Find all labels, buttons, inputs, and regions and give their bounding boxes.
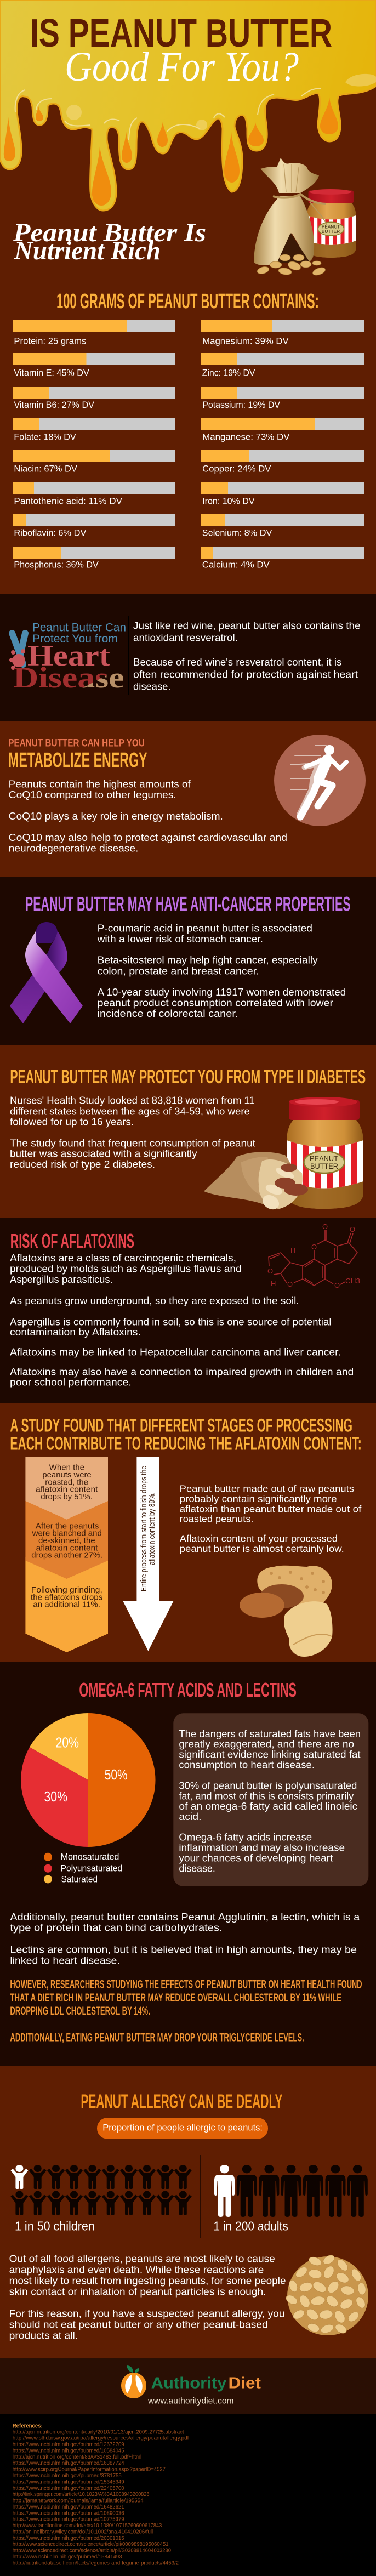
title: Good For You? [65, 44, 299, 90]
callout: saturated fats: The dangers of saturated fats have been [179, 1728, 361, 1739]
text: anaphylaxis [9, 2254, 286, 2341]
references list: https://www.ncbi.nlm.nih.gov/pubmed/16387724 [13, 2460, 124, 2466]
panel: omega-6 and lectins [0, 1662, 376, 2066]
text: anaphylaxis: Out of all food allergens, peanuts are most likely to cause [9, 2254, 275, 2265]
icon: aflatoxin molecule: O [311, 1243, 317, 1251]
arrow: entire process: aflatoxin content by 89%. [148, 1492, 157, 1565]
bar chart: nutrients left [13, 320, 175, 570]
callout: saturated fats: significant evidence linking saturated fat [179, 1749, 361, 1760]
text: anaphylaxis: products at all. [9, 2330, 78, 2341]
icon: aflatoxin molecule: O [267, 1267, 273, 1275]
bar chart: nutrients right: Zinc: 19% DV [202, 368, 255, 378]
icon: aflatoxin molecule: O [287, 1280, 293, 1288]
pill label: proportion [97, 2118, 268, 2139]
heading: heart disease: Protect You from [32, 633, 118, 645]
icon: orange logo [121, 2365, 146, 2398]
references list: https://www.ncbi.nlm.nih.gov/pubmed/22405700 [13, 2485, 124, 2492]
chevron steps: aflatoxin content [36, 1485, 98, 1494]
orange drip centres [4, 97, 338, 206]
references list: https://www.ncbi.nlm.nih.gov/pubmed/16482621 [13, 2504, 124, 2510]
icon: purple ribbon [10, 922, 83, 1023]
pictogram: children [10, 2165, 192, 2215]
text: CoQ10: CoQ10 compared to other legumes. [9, 789, 176, 800]
bar chart: nutrients left: Niacin: 67% DV [14, 464, 77, 474]
text: cancer: peanut product consumption correlated with lower [98, 997, 333, 1008]
illustration: peanut butter jar: PEANUT [310, 1154, 338, 1163]
icon: aflatoxin molecule [267, 1222, 360, 1289]
references list: http://ajcn.nutrition.org/content/83/6/S1483.full.pdf+html [13, 2454, 141, 2460]
references list: https://www.ncbi.nlm.nih.gov/pubmed/20301015 [13, 2535, 124, 2541]
text: aflatoxins: Aspergillus is commonly found in soil, so this is one source of potential [10, 1317, 332, 1328]
icon: aflatoxin molecule: O [322, 1222, 328, 1231]
text: lectins: Lectins are common, but it is believed that in high amounts, they may be [10, 1944, 357, 1955]
pie chart: fat composition: 50% [105, 1766, 128, 1783]
references list: https://www.ncbi.nlm.nih.gov/pubmed/10584045 [13, 2447, 124, 2454]
text: resveratrol: often recommended for protection against heart [133, 669, 358, 680]
bar chart: nutrients left: Folate: 18% DV [14, 432, 76, 442]
references list: https://www.ncbi.nlm.nih.gov/pubmed/12672709 [13, 2441, 124, 2448]
icon: aflatoxin molecule: O [350, 1225, 355, 1233]
icon: stethoscope gear [9, 633, 25, 670]
text: diabetes study: Nurses' Health Study looked at 83,818 women from 11 [10, 1095, 255, 1106]
illustration: jar behind sack: BUTTER [322, 229, 340, 234]
references list: https://www.ncbi.nlm.nih.gov/pubmed/15345349 [13, 2478, 124, 2485]
text: aflatoxins [10, 1253, 354, 1387]
pill label: proportion: Proportion of people allergic to peanuts: [102, 2123, 263, 2133]
callout: saturated fats: consumption to heart disease. [179, 1759, 315, 1770]
references list: https://www.ncbi.nlm.nih.gov/pubmed/10890036 [13, 2510, 124, 2516]
text: cancer: incidence of colorectal caner. [98, 1008, 238, 1019]
chevron steps: Following grinding, [31, 1585, 102, 1595]
title [30, 12, 332, 90]
bar chart: nutrients right: Iron: 10% DV [202, 496, 255, 506]
text: resveratrol: antioxidant resveratrol. [133, 632, 238, 643]
arrow: entire process [123, 1457, 174, 1651]
heading: aflatoxins: RISK OF AFLATOXINS [10, 1230, 134, 1252]
icon: runner [274, 735, 366, 826]
text: cancer: with a lower risk of stomach cancer. [97, 934, 263, 945]
illustration: jar behind sack [307, 189, 356, 258]
heading: heart disease: Disease [13, 661, 124, 694]
chevron steps [25, 1457, 108, 1652]
references list: http://www.tandfonline.com/doi/abs/10.1080/10715760600617843 [13, 2522, 162, 2529]
illustration: peanuts [240, 1566, 333, 1657]
chevron steps: When the [49, 1463, 84, 1472]
text: CoQ10: Peanuts contain the highest amounts of [9, 779, 191, 790]
references list: http://jamanetwork.com/journals/jama/fullarticle/195554 [13, 2498, 144, 2504]
text: raw versus roasted: Aflatoxin content of your processed [180, 1533, 338, 1544]
text: anaphylaxis: anaphylaxis and even death. While these reactions are [9, 2265, 264, 2276]
panel: risk of aflatoxins [0, 1218, 376, 1403]
drip highlights [15, 89, 321, 140]
text: cancer: P-coumaric acid in peanut butter is associated [98, 923, 312, 934]
legend [44, 1852, 122, 1884]
text: diabetes study: different states between the ages of 34-59, who were [10, 1106, 250, 1117]
text: aflatoxins: Aflatoxins are a class of carcinogenic chemicals, [10, 1253, 236, 1264]
bar chart: nutrients right: Calcium: 4% DV [202, 560, 270, 570]
text: anaphylaxis: For this reason, if you have a suspected peanut allergy, you [9, 2308, 284, 2319]
illustration: peanut butter jar [287, 1097, 363, 1209]
bar chart: nutrients left: Riboflavin: 6% DV [14, 528, 86, 538]
text: aflatoxins: As peanuts grow underground, so they are exposed to the soil. [10, 1295, 299, 1306]
logo wordmark: Authority [151, 2375, 226, 2392]
chevron steps: de-skinned, the [38, 1536, 95, 1545]
bar chart: nutrients right: Potassium: 19% DV [202, 400, 280, 410]
illustration: peanut sack [254, 158, 327, 277]
text: raw versus roasted: Peanut butter made out of raw peanuts [180, 1483, 354, 1494]
references heading: References: [13, 2423, 43, 2429]
text: cancer: A 10-year study involving 11917 women demonstrated [98, 987, 346, 998]
chevron steps: roasted, the [45, 1477, 88, 1487]
text: raw versus roasted: peanut butter is almost certainly low. [180, 1543, 344, 1554]
heading: heart disease: Peanut Butter Can [32, 622, 126, 634]
text: diabetes study: followed for up to 16 years. [10, 1116, 134, 1127]
text: lectins: type of protein that can bind carbohydrates. [10, 1923, 223, 1934]
text: raw versus roasted [180, 1483, 361, 1554]
chevron steps: the aflatoxins drops [31, 1593, 102, 1602]
chevron steps: drops by 51%. [41, 1492, 93, 1502]
subheading: nutrient rich: Nutrient Rich [14, 236, 161, 265]
icon: aflatoxin molecule: O [334, 1281, 340, 1289]
heading: metabolize: METABOLIZE ENERGY [8, 749, 147, 772]
references list: https://www.ncbi.nlm.nih.gov/pubmed/10775379 [13, 2516, 124, 2523]
legend: Monosaturated [61, 1852, 119, 1862]
legend: Polyunsaturated [61, 1863, 122, 1873]
references list: http://www.sciencedirect.com/science/article/pii/S0308814604003280 [13, 2547, 171, 2554]
chevron steps: an additional 11%. [33, 1600, 100, 1610]
references list [13, 2429, 189, 2566]
heading: processing study [10, 1415, 362, 1454]
references list: http://link.springer.com/article/10.1023/A%3A1008943200826 [13, 2491, 150, 2498]
references list: http://www.slhd.nsw.gov.au/rpa/allergy/resources/allergy/peanutallergy.pdf [13, 2435, 189, 2442]
chevron steps: aflatoxin content [36, 1543, 98, 1553]
callout: saturated fats: disease. [179, 1863, 215, 1874]
heading: metabolize [8, 738, 147, 772]
pie chart: fat composition: 30% [44, 1788, 67, 1805]
panel: nutrient header and bars [0, 0, 376, 594]
text: lectins [10, 1912, 360, 1966]
panel: footer logo [0, 2358, 376, 2414]
text: lectins: linked to heart disease. [10, 1955, 120, 1966]
panel: metabolize energy [0, 721, 376, 877]
callout: saturated fats: your chances of developing heart [179, 1853, 333, 1864]
text: cancer [97, 923, 346, 1019]
text: resveratrol: disease. [133, 681, 171, 692]
callout: saturated fats: fat, and most of this is consists primarily [179, 1790, 354, 1801]
pictogram: adults [214, 2165, 368, 2217]
text: diabetes study: reduced risk of type 2 diabetes. [10, 1159, 155, 1170]
text: raw versus roasted: roasted peanuts. [180, 1514, 253, 1525]
panel: peanut allergy [0, 2066, 376, 2358]
references list: http://nutritiondata.self.com/facts/legumes-and-legume-products/4453/2 [13, 2560, 179, 2566]
text: aflatoxins: produced by molds such as Aspergillus flavus and [10, 1264, 242, 1275]
heading: heart disease [13, 622, 126, 694]
panel: anti-cancer [0, 877, 376, 1045]
panel: references [0, 2414, 376, 2576]
text: resveratrol: Because of red wine's resveratrol content, it is [133, 657, 341, 668]
icon: aflatoxin molecule: H [271, 1280, 276, 1288]
illustration: peanut pile [284, 2253, 368, 2335]
stat: adults: 1 in 200 adults [213, 2219, 288, 2233]
references list: http://www.ncbi.nlm.nih.gov/pubmed/15841493 [13, 2554, 122, 2560]
callout: saturated fats: acid. [179, 1811, 202, 1822]
icon: aflatoxin molecule: H [290, 1246, 295, 1254]
text: anaphylaxis: skin contact or inhalation of peanut particles is enough. [9, 2287, 266, 2298]
logo wordmark: Diet [228, 2375, 261, 2392]
logo wordmark [147, 2375, 261, 2406]
text: CoQ10 [9, 779, 287, 854]
bar chart: nutrients left: Protein: 25 grams [14, 337, 86, 346]
text: CoQ10: neurodegenerative disease. [9, 843, 138, 854]
text: diabetes study [10, 1095, 255, 1170]
heading: heart disease: Heart [27, 639, 110, 672]
references list: http://www.scirp.org/Journal/PaperInformation.aspx?paperID=4527 [13, 2466, 166, 2473]
text: aflatoxins: Aflatoxins may be linked to Hepatocellular carcinoma and liver cancer. [10, 1346, 341, 1357]
text: aflatoxins: Aspergillus parasiticus. [10, 1274, 113, 1285]
bar chart: nutrients right: Copper: 24% DV [202, 464, 271, 474]
text: CoQ10: CoQ10 plays a key role in energy metabolism. [9, 811, 223, 822]
illustration: jar behind sack: PEANUT [322, 224, 340, 229]
text: aflatoxins: Aflatoxins may also have a connection to impaired growth in children and [10, 1366, 354, 1377]
chevron steps: drops another 27%. [31, 1551, 102, 1560]
pie chart: fat composition [21, 1713, 156, 1847]
references list: http://ajcn.nutrition.org/content/early/2010/01/13/ajcn.2009.27725.abstract [13, 2429, 184, 2435]
bar chart: nutrients right: Manganese: 73% DV [202, 432, 289, 442]
peanut butter drip banner [0, 0, 376, 211]
text: CoQ10: CoQ10 may also help to protect against cardiovascular and [9, 832, 287, 843]
text: anaphylaxis: should not eat peanut butter or any other peanut-based [9, 2319, 268, 2330]
bar chart: nutrients right [201, 320, 364, 570]
arrow: entire process: Entire process from start to finish drops the [140, 1466, 149, 1591]
logo wordmark: www.authoritydiet.com [147, 2396, 234, 2406]
text: aflatoxins: contamination by Aflatoxins. [10, 1327, 141, 1338]
subheading: nutrient rich [13, 218, 206, 265]
references list: http://www.sciencedirect.com/science/article/pii/0009898195060451 [13, 2541, 169, 2547]
callout: saturated fats: inflammation and may also increase [179, 1843, 345, 1853]
references list: https://www.ncbi.nlm.nih.gov/pubmed/3781755 [13, 2472, 122, 2479]
panel: type II diabetes [10, 1070, 365, 1209]
bar chart: nutrients left: Pantothenic acid: 11% DV [14, 496, 122, 506]
bar chart: nutrients left: Vitamin E: 45% DV [14, 368, 89, 378]
text: diabetes study: butter was associated with a significantly [10, 1148, 197, 1159]
callout: saturated fats: of an omega-6 fatty acid called linoleic [179, 1801, 357, 1812]
text: cancer: colon, prostate and breast cancer. [98, 965, 259, 976]
panel: processing stages [0, 1403, 376, 1662]
callout: saturated fats: greatly exaggerated, and there are no [179, 1739, 354, 1750]
heading: metabolize: PEANUT BUTTER CAN HELP YOU [8, 738, 145, 749]
chevron steps: peanuts were [42, 1470, 92, 1480]
subheading: nutrient rich: Peanut Butter Is [13, 218, 206, 247]
chevron steps: were blanched and [32, 1529, 102, 1538]
icon: aflatoxin molecule: CH3 [345, 1277, 360, 1285]
pie chart: fat composition: 20% [56, 1734, 79, 1750]
text: resveratrol [133, 620, 361, 692]
bar chart: nutrients right: Magnesium: 39% DV [202, 337, 289, 346]
legend: Saturated [61, 1874, 98, 1884]
references list: http://onlinelibrary.wiley.com/doi/10.1002/ana.410410206/full [13, 2528, 153, 2535]
callout: cholesterol findings: DROPPING LDL CHOLESTEROL BY 14%. [10, 2005, 150, 2017]
text: resveratrol: Just like red wine, peanut butter also contains the [133, 620, 361, 631]
text: lectins: Additionally, peanut butter contains Peanut Agglutinin, a lectin, which is a [10, 1912, 360, 1923]
chevron steps: After the peanuts [36, 1521, 99, 1531]
text: diabetes study: The study found that frequent consumption of peanut [10, 1138, 255, 1148]
bar chart: nutrients left: Phosphorus: 36% DV [14, 560, 99, 570]
illustration: peanut butter jar: BUTTER [310, 1162, 338, 1170]
text: raw versus roasted: probably contain significantly more [180, 1493, 337, 1504]
callout: saturated fats [173, 1713, 368, 1886]
text: raw versus roasted: aflatoxin than peanut butter made out of [180, 1503, 361, 1514]
illustration: sack with peanuts [204, 1152, 308, 1212]
bar chart: nutrients left: Vitamin B6: 27% DV [14, 400, 94, 410]
callout: saturated fats: Omega-6 fatty acids increase [179, 1832, 312, 1843]
text: anaphylaxis: most likely to result from ingesting peanuts, for some people [9, 2276, 286, 2287]
text: aflatoxins: poor school performance. [10, 1377, 132, 1387]
callout: saturated fats: 30% of peanut butter is polyunsaturated [179, 1780, 357, 1791]
panel: heart disease [0, 594, 376, 721]
callout: cholesterol findings [10, 1978, 362, 2044]
bar chart: nutrients right: Selenium: 8% DV [202, 528, 272, 538]
stat: children: 1 in 50 children [15, 2219, 95, 2233]
text: cancer: Beta-sitosterol may help fight cancer, especially [98, 955, 318, 966]
